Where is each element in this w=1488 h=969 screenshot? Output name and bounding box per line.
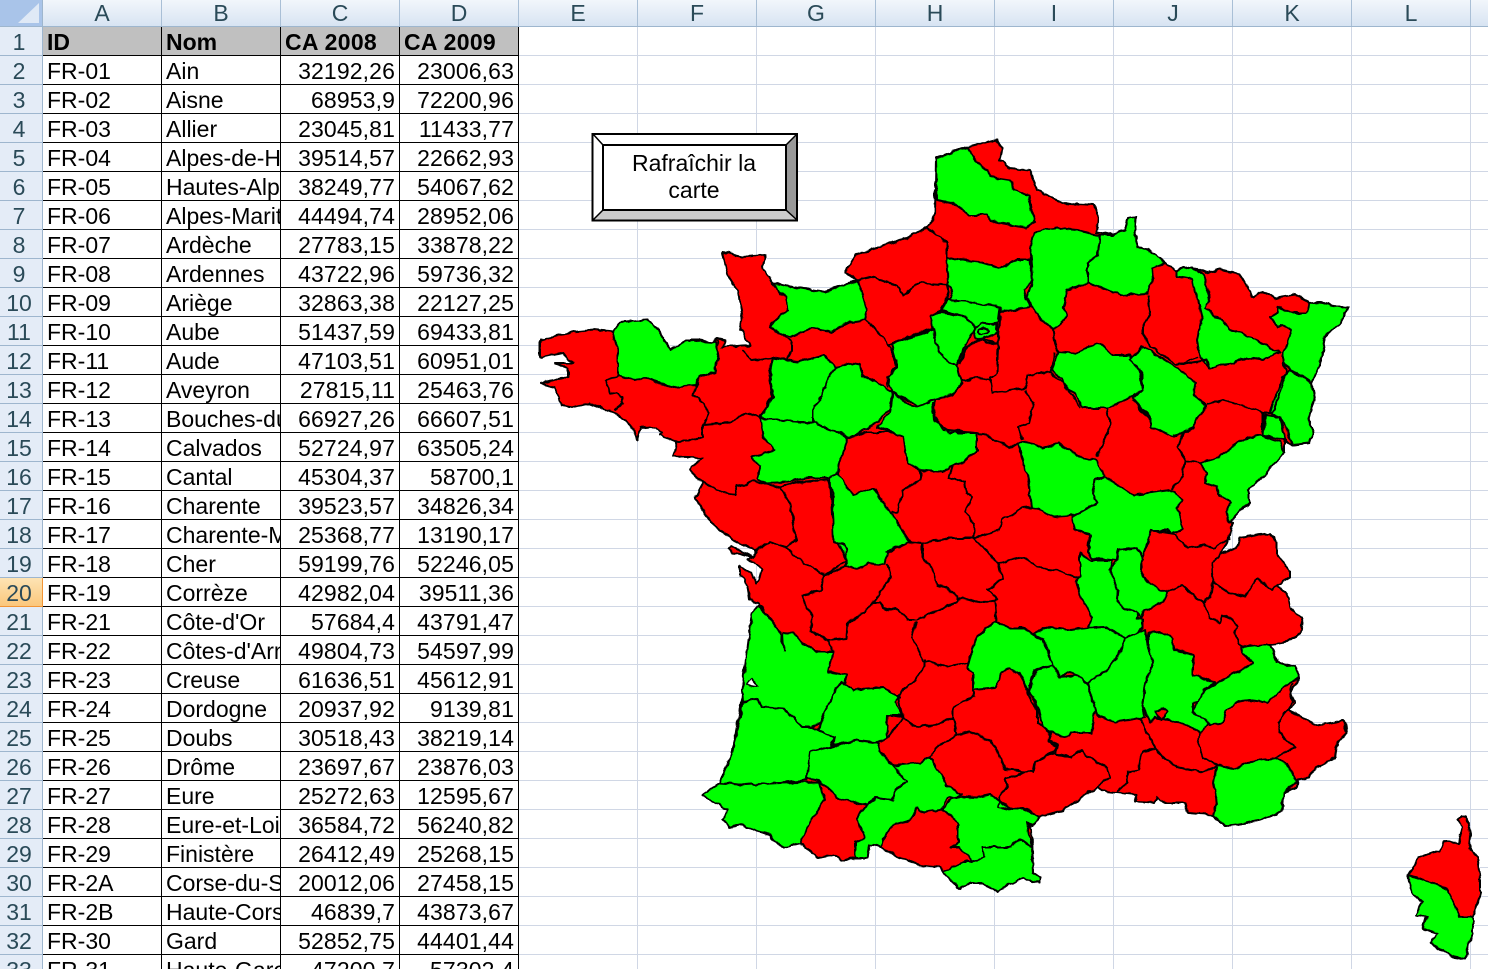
data table: Ariège: [166, 290, 232, 316]
data table: 54067,62: [417, 174, 514, 200]
data table: 58700,1: [430, 464, 514, 490]
button: Rafraîchir la carte: carte: [668, 177, 720, 203]
select-all corner: [0, 0, 43, 26]
column headers A to L: C: [332, 0, 348, 26]
row numbers: 32: [6, 928, 32, 954]
data table: 34826,34: [417, 493, 514, 519]
row numbers: 30: [6, 870, 32, 896]
column headers A to L: D: [451, 0, 467, 26]
data table: Finistère: [166, 841, 254, 867]
data table: 44401,44: [417, 928, 514, 954]
data table: 42982,04: [298, 580, 395, 606]
row numbers: 26: [6, 754, 32, 780]
row numbers: 15: [6, 435, 32, 461]
row numbers: 3: [13, 87, 25, 113]
row numbers: 11: [7, 319, 31, 345]
column headers A to L: K: [1284, 0, 1300, 26]
row numbers: 16: [6, 464, 32, 490]
row numbers: 6: [13, 174, 25, 200]
data table: FR-07: [47, 232, 111, 258]
column headers A to L: F: [690, 0, 704, 26]
enclave and central Paris: [978, 328, 1167, 720]
data table: FR-11: [47, 348, 109, 374]
row numbers: 25: [6, 725, 32, 751]
row numbers: 1: [13, 29, 25, 55]
all departments: [540, 139, 1480, 959]
row numbers: 5: [13, 145, 25, 171]
data table: 54597,99: [417, 638, 514, 664]
row numbers: 19: [6, 551, 32, 577]
row numbers: 23: [6, 667, 32, 693]
data table: FR-24: [47, 696, 111, 722]
column headers A to L: L: [1405, 0, 1417, 26]
button: Rafraîchir la carte: [592, 133, 798, 222]
column headers A to L: [0, 0, 1488, 27]
column headers A to L: J: [1167, 0, 1179, 26]
data table: FR-10: [47, 319, 111, 345]
data table: 27783,15: [298, 232, 395, 258]
table header row: ID: [47, 29, 70, 55]
data table: FR-15: [47, 464, 111, 490]
data table: Aisne: [166, 87, 224, 113]
data table: 61636,51: [298, 667, 395, 693]
data table: 45612,91: [417, 667, 514, 693]
row numbers: 13: [6, 377, 32, 403]
data table: Charente: [166, 493, 261, 519]
row numbers: 21: [6, 609, 32, 635]
row numbers: 10: [6, 290, 32, 316]
table header row: [43, 27, 519, 56]
data table: FR-12: [47, 377, 111, 403]
column headers A to L: E: [570, 0, 586, 26]
red departments: mainland silhouette: [540, 139, 1348, 892]
data table: 26412,49: [298, 841, 395, 867]
data table: 25268,15: [417, 841, 514, 867]
worksheet cell grid: [519, 27, 1488, 969]
data table: 27815,11: [300, 377, 395, 403]
row numbers: 28: [6, 812, 32, 838]
data table: FR-22: [47, 638, 111, 664]
data table: 57684,4: [311, 609, 395, 635]
data table: [43, 27, 519, 969]
data table: Cantal: [166, 464, 232, 490]
data table: 23006,63: [417, 58, 514, 84]
table header row: CA 2008: [285, 29, 377, 55]
row numbers: 20: [6, 580, 32, 606]
data table: Doubs: [166, 725, 232, 751]
data table: Côte-d'Or: [166, 609, 265, 635]
data table: FR-05: [47, 174, 111, 200]
data table: 68953,9: [311, 87, 395, 113]
data table: FR-04: [47, 145, 111, 171]
data table: FR-26: [47, 754, 111, 780]
data table: Aveyron: [166, 377, 250, 403]
data table: FR-08: [47, 261, 111, 287]
data table: 43791,47: [417, 609, 514, 635]
data table: Gard: [166, 928, 217, 954]
data table: Dordogne: [166, 696, 267, 722]
row numbers: 24: [6, 696, 32, 722]
data table: FR-29: [47, 841, 111, 867]
data table: FR-2B: [47, 899, 113, 925]
data table: 33878,22: [417, 232, 514, 258]
data table: 22127,25: [417, 290, 514, 316]
table header row: CA 2009: [404, 29, 496, 55]
data table: Ardèche: [166, 232, 252, 258]
data table: FR-30: [47, 928, 111, 954]
row numbers: 2: [13, 58, 25, 84]
data table: 46839,7: [311, 899, 395, 925]
data table: 52246,05: [417, 551, 514, 577]
data table: FR-2A: [47, 870, 113, 896]
data table: 30518,43: [298, 725, 395, 751]
Haute-Corse: [1408, 816, 1480, 917]
row numbers: 29: [6, 841, 32, 867]
column headers A to L: A: [94, 0, 110, 26]
data table: FR-27: [47, 783, 111, 809]
data table: FR-06: [47, 203, 111, 229]
row numbers: 31: [6, 899, 32, 925]
data table: 49804,73: [298, 638, 395, 664]
island: Ile de Ré: [729, 547, 753, 558]
data table: 60951,01: [417, 348, 514, 374]
data table: Cher: [166, 551, 216, 577]
column headers A to L: B: [213, 0, 229, 26]
data table: 39514,57: [298, 145, 395, 171]
row numbers: 22: [6, 638, 32, 664]
data table: 20937,92: [298, 696, 395, 722]
data table: 52852,75: [298, 928, 395, 954]
button: Rafraîchir la carte: Rafraîchir la: [632, 150, 756, 176]
data table: FR-25: [47, 725, 111, 751]
data table: Eure: [166, 783, 215, 809]
data table: FR-14: [47, 435, 111, 461]
column headers A to L: I: [1051, 0, 1057, 26]
boundaries between red departments: [605, 227, 1295, 810]
data table: FR-13: [47, 406, 111, 432]
data table: 32863,38: [298, 290, 395, 316]
data table: FR-03: [47, 116, 111, 142]
Corse-du-Sud: [1408, 875, 1473, 959]
green departments: [613, 147, 1348, 892]
data table: 9139,81: [430, 696, 514, 722]
data table: 44494,74: [298, 203, 395, 229]
data table: 23876,03: [417, 754, 514, 780]
data table: 36584,72: [298, 812, 395, 838]
white bay: Arcachon: [746, 678, 758, 687]
data table: 59736,32: [417, 261, 514, 287]
row numbers: 8: [13, 232, 25, 258]
data table: Aude: [166, 348, 220, 374]
data table: 45304,37: [298, 464, 395, 490]
data table: 25272,63: [298, 783, 395, 809]
data table: 43873,67: [417, 899, 514, 925]
data table: FR-02: [47, 87, 111, 113]
data table: 51437,59: [298, 319, 395, 345]
data table: 11433,77: [419, 116, 514, 142]
data table: Corrèze: [166, 580, 248, 606]
data table: 59199,76: [298, 551, 395, 577]
Corsica: [1408, 816, 1480, 959]
data table: 56240,82: [417, 812, 514, 838]
data table: Ardennes: [166, 261, 264, 287]
data table: 23045,81: [298, 116, 395, 142]
data table: 63505,24: [417, 435, 514, 461]
data table: FR-09: [47, 290, 111, 316]
data table: Aube: [166, 319, 220, 345]
row numbers: 9: [13, 261, 25, 287]
data table: 25368,77: [298, 522, 395, 548]
data table: 13190,17: [417, 522, 514, 548]
data table: 12595,67: [417, 783, 514, 809]
row numbers: 12: [6, 348, 32, 374]
data table: Calvados: [166, 435, 262, 461]
table header row: Nom: [166, 29, 217, 55]
data table: 23697,67: [298, 754, 395, 780]
data table: 20012,06: [298, 870, 395, 896]
row numbers: 18: [6, 522, 32, 548]
data table: FR-28: [47, 812, 111, 838]
row numbers: 4: [13, 116, 25, 142]
data table: Allier: [166, 116, 217, 142]
data table: 66927,26: [298, 406, 395, 432]
data table: 25463,76: [417, 377, 514, 403]
data table: 39523,57: [298, 493, 395, 519]
data table: Creuse: [166, 667, 240, 693]
column headers A to L: G: [807, 0, 825, 26]
data table: 38219,14: [417, 725, 514, 751]
data table: 72200,96: [417, 87, 514, 113]
column headers A to L: H: [927, 0, 943, 26]
data table: 27458,15: [417, 870, 514, 896]
data table: FR-01: [47, 58, 111, 84]
data table: 22662,93: [417, 145, 514, 171]
data table: FR-23: [47, 667, 111, 693]
row numbers: 7: [13, 203, 25, 229]
data table: 43722,96: [298, 261, 395, 287]
row numbers: 17: [6, 493, 32, 519]
data table: 28952,06: [417, 203, 514, 229]
data table: FR-16: [47, 493, 111, 519]
data table: 39511,36: [419, 580, 514, 606]
row numbers: 27: [6, 783, 32, 809]
data table: 47103,51: [298, 348, 395, 374]
data table: FR-17: [47, 522, 111, 548]
data table: 38249,77: [298, 174, 395, 200]
data table: 66607,51: [417, 406, 514, 432]
data table: 32192,26: [298, 58, 395, 84]
data table: FR-18: [47, 551, 111, 577]
data table: 52724,97: [298, 435, 395, 461]
row numbers: [0, 27, 43, 969]
data table: Ain: [166, 58, 199, 84]
data table: FR-21: [47, 609, 111, 635]
row numbers: 14: [6, 406, 32, 432]
data table: FR-19: [47, 580, 111, 606]
data table: 69433,81: [417, 319, 514, 345]
data table: Drôme: [166, 754, 235, 780]
